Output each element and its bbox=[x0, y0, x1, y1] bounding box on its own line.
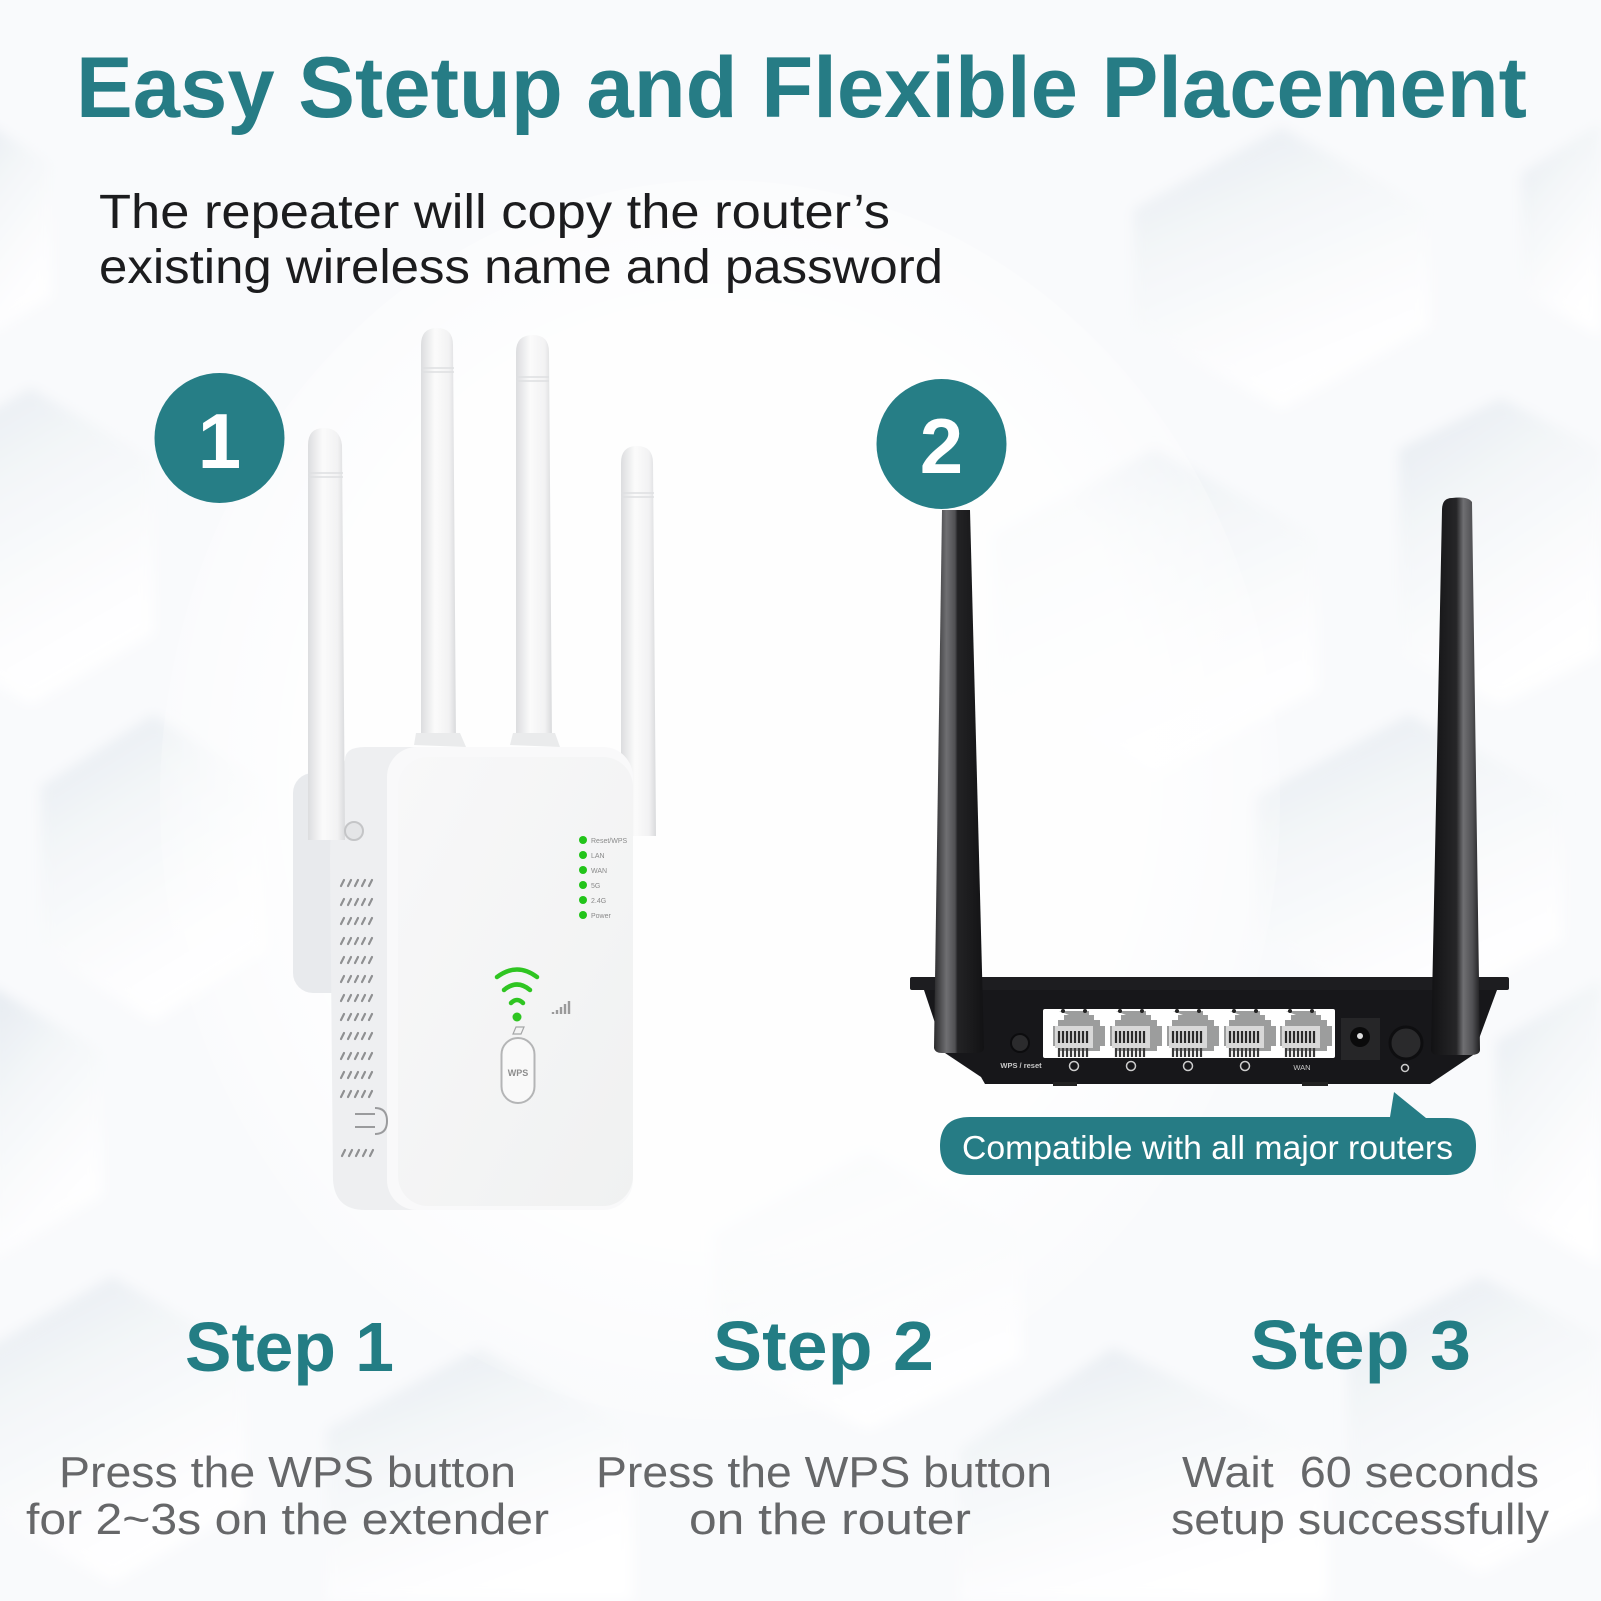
step 1 bbox=[26, 1308, 549, 1544]
rear antennas bbox=[421, 328, 656, 836]
step 3 description: setup successfully bbox=[1171, 1495, 1549, 1544]
step 1 description bbox=[26, 1448, 549, 1544]
callout: compatible with all major routers bbox=[940, 1092, 1476, 1175]
step 3 heading: Step 3 bbox=[1250, 1306, 1471, 1384]
antennas bbox=[934, 510, 984, 1053]
power jack bbox=[1341, 1018, 1380, 1060]
WPS button bbox=[502, 1027, 534, 1103]
signal bars bbox=[553, 1001, 569, 1014]
wifi icon bbox=[497, 970, 537, 1022]
status LEDs: LAN bbox=[591, 853, 605, 860]
step 1 description: for 2~3s on the extender bbox=[26, 1495, 549, 1544]
step 2 description bbox=[596, 1448, 1052, 1544]
intro text: existing wireless name and password bbox=[99, 241, 943, 294]
LAN and WAN port panel bbox=[1043, 1009, 1335, 1058]
step 2 heading: Step 2 bbox=[713, 1307, 934, 1385]
port labels bbox=[1000, 1061, 1408, 1072]
badge: number 2 bbox=[876, 379, 1006, 509]
antenna hinge bbox=[345, 822, 363, 840]
badge: number 1 bbox=[154, 373, 284, 503]
side housing bbox=[330, 747, 420, 1210]
front antenna bbox=[308, 428, 345, 840]
step 3 bbox=[1171, 1306, 1549, 1544]
step 1 description: Press the WPS button bbox=[59, 1448, 516, 1497]
intro text bbox=[99, 186, 943, 294]
port labels: WAN bbox=[1293, 1063, 1311, 1072]
status LEDs: 5G bbox=[591, 883, 600, 890]
power button bbox=[1390, 1027, 1422, 1059]
status LEDs bbox=[579, 836, 628, 920]
top plate bbox=[910, 977, 1509, 990]
front panel bbox=[387, 747, 633, 1210]
status LEDs: WAN bbox=[591, 868, 607, 875]
side vents bbox=[341, 880, 373, 1156]
rear plug bbox=[293, 773, 363, 993]
title: Easy Stetup and Flexible Placement bbox=[76, 40, 1527, 136]
rubber feet bbox=[1053, 1082, 1328, 1086]
status LEDs: Power bbox=[591, 913, 612, 920]
port labels: WPS / reset bbox=[1000, 1061, 1042, 1070]
callout: compatible with all major routers: Compatible with all major routers bbox=[962, 1129, 1453, 1166]
step 2 bbox=[596, 1307, 1052, 1544]
router body bbox=[924, 990, 1497, 1084]
step 3 description bbox=[1171, 1448, 1549, 1544]
badge: number 2: 2 bbox=[920, 402, 963, 490]
step 2 description: on the router bbox=[689, 1495, 971, 1544]
router device bbox=[910, 498, 1509, 1086]
badge: number 1: 1 bbox=[198, 397, 241, 485]
reset key icon bbox=[355, 1108, 387, 1134]
WPS reset button bbox=[1011, 1034, 1029, 1052]
step 2 description: Press the WPS button bbox=[596, 1448, 1052, 1497]
step 1 heading: Step 1 bbox=[185, 1308, 394, 1386]
WPS button: WPS bbox=[508, 1068, 528, 1078]
step 3 description: Wait 60 seconds bbox=[1182, 1448, 1539, 1497]
extender device bbox=[293, 328, 656, 1210]
intro text: The repeater will copy the router’s bbox=[99, 186, 890, 239]
status LEDs: Reset/WPS bbox=[591, 838, 628, 845]
status LEDs: 2.4G bbox=[591, 898, 606, 905]
